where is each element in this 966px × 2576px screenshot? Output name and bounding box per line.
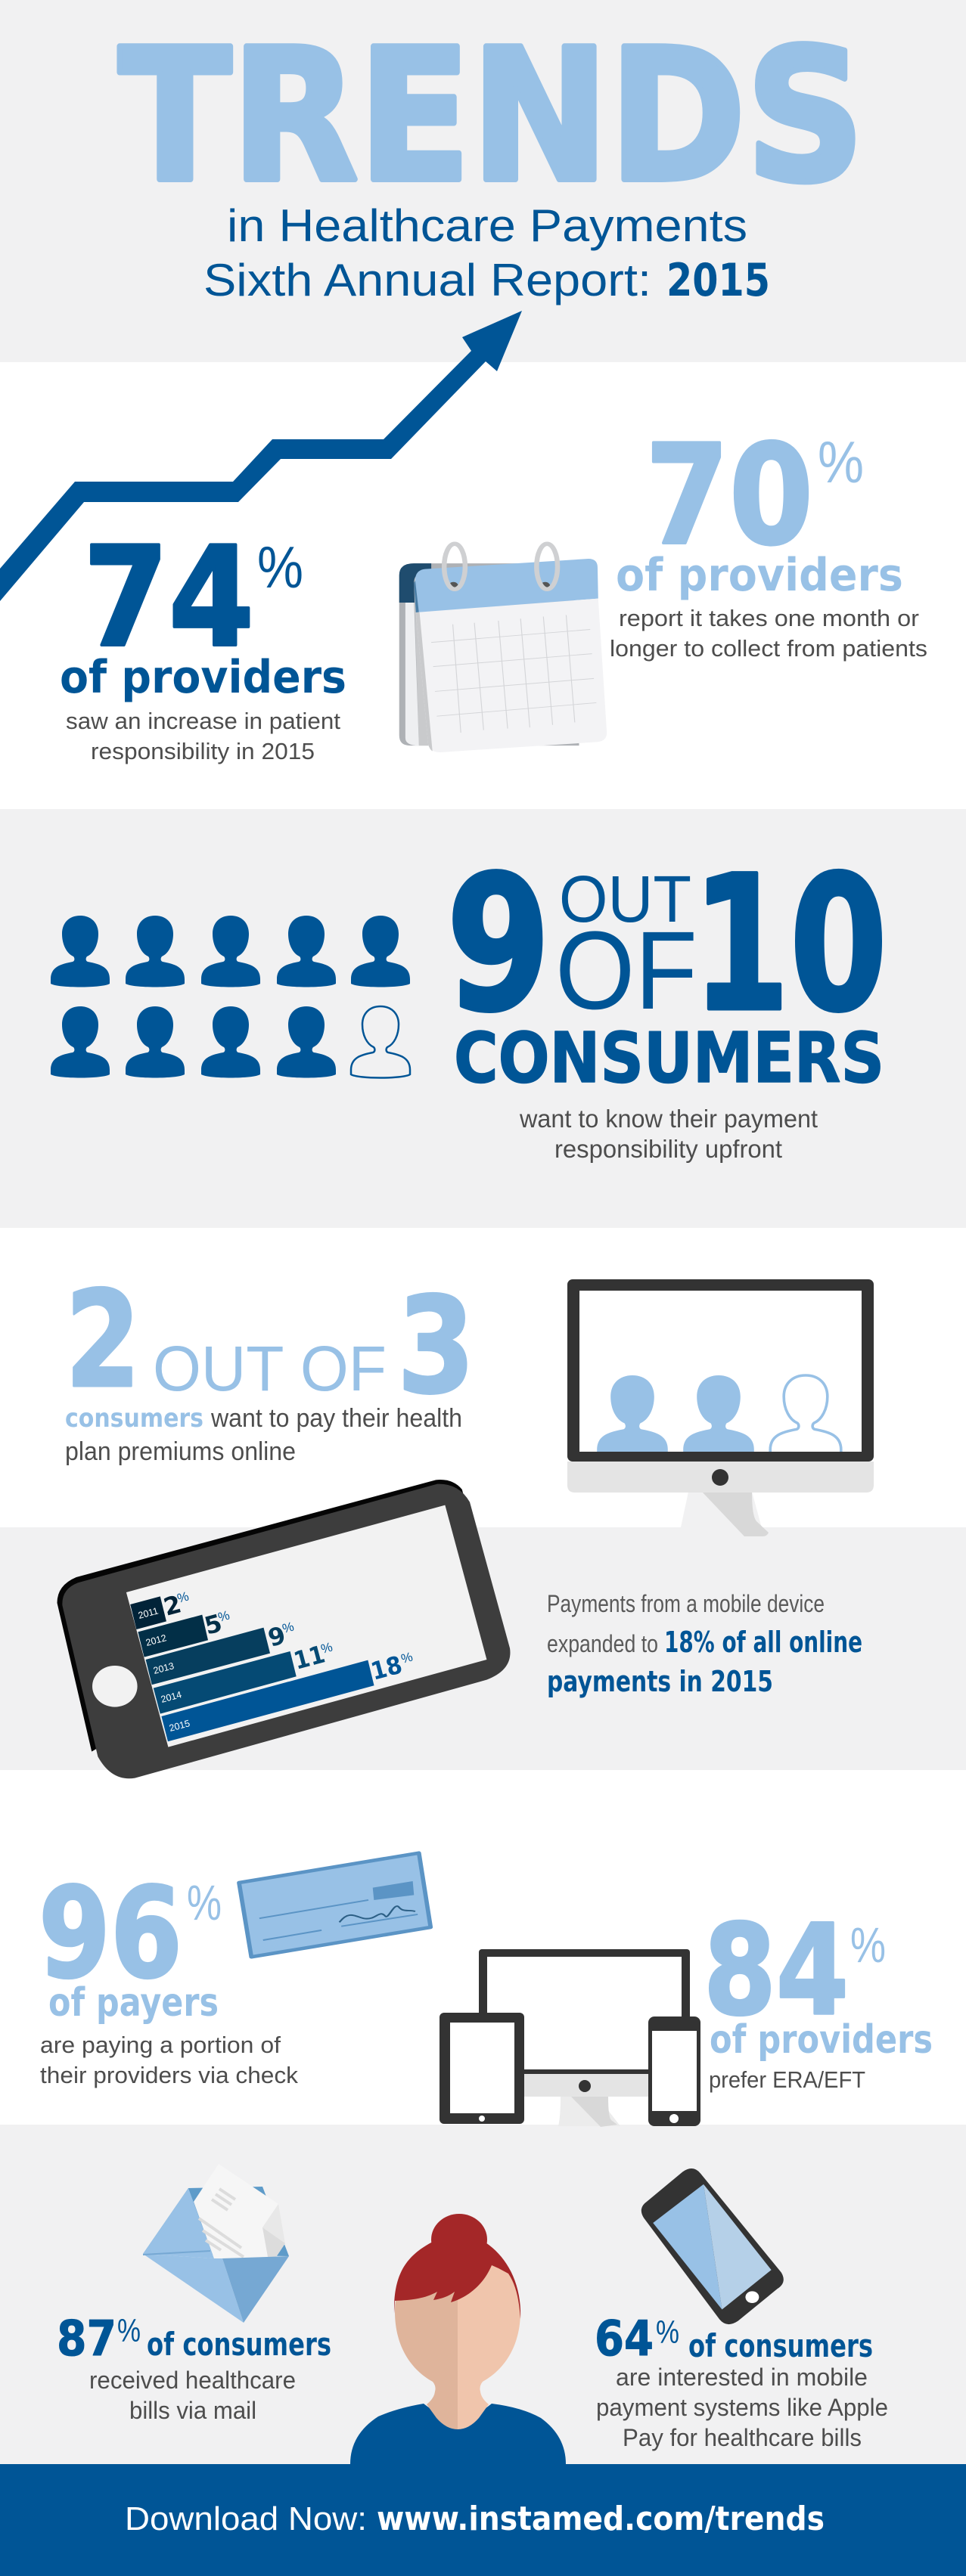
icon: landscape phone with bar chart bbox=[57, 1480, 510, 1778]
chart labels: 9 bbox=[265, 1620, 289, 1653]
stat: 70% of providers: 70 bbox=[645, 415, 813, 575]
stat: 87% of consumers: bills via mail bbox=[129, 2397, 256, 2424]
icon: calendar bbox=[399, 544, 607, 752]
stat: 96% of payers: 96 bbox=[39, 1861, 182, 2006]
stat: 64% of consumers: 64 bbox=[595, 2311, 654, 2367]
chart labels: 2011 bbox=[137, 1605, 160, 1621]
stat: 64% of consumers: are interested in mobile bbox=[616, 2364, 868, 2391]
illustration: woman bbox=[350, 2214, 566, 2464]
chart labels: 2015 bbox=[168, 1718, 191, 1734]
stat: 9 out of 10 consumers bbox=[446, 837, 887, 1163]
stat: 2 out of 3 consumers: OUT OF bbox=[153, 1333, 387, 1404]
stat: 84% of providers: prefer ERA/EFT bbox=[709, 2066, 865, 2093]
chart labels: % bbox=[399, 1650, 415, 1666]
stat: 96% of payers: are paying a portion of bbox=[40, 2032, 281, 2058]
chart labels: % bbox=[281, 1620, 296, 1636]
stat: 96% of payers bbox=[39, 1861, 299, 2088]
stat: 2 out of 3 consumers bbox=[65, 1263, 475, 1466]
stat: 74% of providers: saw an increase in patient bbox=[66, 708, 340, 734]
subtitle line two bbox=[203, 254, 770, 307]
text: mobile payments: Payments from a mobile device bbox=[547, 1590, 825, 1617]
stat: 64% of consumers: % bbox=[656, 2314, 679, 2351]
icon: envelope with letter bbox=[143, 2164, 289, 2323]
panel: header background bbox=[0, 0, 966, 362]
stat: 84% of providers: 84 bbox=[704, 1898, 849, 2043]
stat: 2 out of 3 consumers: 2 bbox=[65, 1263, 141, 1418]
stat: 64% of consumers: payment systems like Apple bbox=[596, 2394, 888, 2421]
chart labels: 2012 bbox=[144, 1632, 168, 1648]
stat: 2 out of 3 consumers: plan premiums online bbox=[65, 1437, 296, 1466]
stat: 87% of consumers: of consumers bbox=[147, 2326, 331, 2363]
stat: 64% of consumers: of consumers bbox=[688, 2327, 873, 2364]
chart labels: 2 bbox=[160, 1589, 185, 1622]
subtitle line two: Sixth Annual Report: bbox=[203, 255, 651, 305]
stat: 2 out of 3 consumers: 3 bbox=[397, 1269, 475, 1424]
icon: desktop, tablet and phone bbox=[440, 1949, 700, 2127]
panel: people background bbox=[0, 809, 966, 1228]
chart labels: % bbox=[216, 1608, 231, 1625]
text: mobile payments: expanded to bbox=[547, 1630, 658, 1657]
stat: 74% of providers: responsibility in 2015 bbox=[91, 738, 315, 764]
stat: 9 out of 10 consumers: OF bbox=[555, 909, 697, 1033]
footer: Download Now: bbox=[125, 2500, 367, 2537]
stat: 87% of consumers bbox=[57, 2311, 331, 2424]
stat: 84% of providers bbox=[704, 1898, 933, 2093]
chart labels: % bbox=[175, 1589, 191, 1606]
stat: 64% of consumers: Pay for healthcare bills bbox=[623, 2424, 862, 2451]
pictogram: nine of ten people bbox=[51, 916, 410, 1078]
chart labels bbox=[137, 1589, 415, 1734]
stat: 74% of providers: of providers bbox=[60, 651, 346, 704]
stat: 70% of providers: report it takes one month or bbox=[619, 605, 919, 631]
footer: www.instamed.com/trends bbox=[377, 2500, 825, 2538]
stat: 70% of providers: of providers bbox=[616, 549, 903, 602]
stat: 87% of consumers: % bbox=[117, 2313, 141, 2349]
stat: 70% of providers bbox=[610, 415, 927, 662]
stat: 2 out of 3 consumers: consumers bbox=[65, 1403, 203, 1434]
stat: 9 out of 10 consumers: 9 bbox=[446, 837, 551, 1053]
stat: 2 out of 3 consumers: want to pay their health bbox=[210, 1404, 462, 1433]
chart labels: 2014 bbox=[160, 1689, 183, 1705]
stat: 74% of providers: 74 bbox=[83, 517, 254, 677]
stat: 96% of payers: their providers via check bbox=[40, 2062, 299, 2088]
stat: 64% of consumers bbox=[595, 2311, 888, 2451]
stat: 87% of consumers: 87 bbox=[57, 2311, 116, 2367]
stat: 70% of providers: longer to collect from patients bbox=[610, 635, 927, 662]
subtitle line two: 2015 bbox=[666, 254, 770, 307]
stat: 9 out of 10 consumers: want to know their payment bbox=[519, 1105, 818, 1133]
chart labels: 5 bbox=[201, 1608, 225, 1641]
stat: 9 out of 10 consumers: responsibility upfront bbox=[554, 1135, 782, 1163]
footer bbox=[0, 2464, 966, 2576]
stat: 9 out of 10 consumers: CONSUMERS bbox=[454, 1018, 884, 1099]
icon: tilted smartphone bbox=[641, 2168, 784, 2324]
chart labels: 2013 bbox=[152, 1660, 175, 1676]
icon: desktop monitor bbox=[567, 1279, 874, 1536]
stat: 84% of providers: % bbox=[850, 1917, 886, 1973]
text: mobile payments: payments in 2015 bbox=[547, 1665, 773, 1698]
stat: 9 out of 10 consumers: 10 bbox=[692, 837, 887, 1053]
icon: check bbox=[239, 1853, 430, 1957]
chart labels: 18 bbox=[368, 1650, 405, 1686]
title: TRENDS bbox=[119, 10, 865, 222]
stat: 9 out of 10 consumers: OUT bbox=[559, 863, 691, 936]
chart labels: % bbox=[319, 1640, 334, 1657]
text: mobile payments bbox=[547, 1590, 862, 1698]
arrow: rising trend bbox=[0, 311, 522, 601]
panel: mail and woman background bbox=[0, 2125, 966, 2465]
stat: 70% of providers: % bbox=[818, 429, 864, 495]
stat: 74% of providers: % bbox=[257, 534, 303, 600]
subtitle line one: in Healthcare Payments bbox=[227, 200, 747, 251]
hair bbox=[394, 2214, 520, 2319]
stat: 96% of payers: of payers bbox=[48, 1980, 219, 2026]
chart labels: 11 bbox=[290, 1639, 328, 1675]
stat: 87% of consumers: received healthcare bbox=[89, 2367, 296, 2394]
panel: mobile background bbox=[0, 1527, 966, 1770]
text: mobile payments: 18% of all online bbox=[664, 1626, 862, 1659]
stat: 96% of payers: % bbox=[187, 1874, 222, 1930]
stat: 74% of providers bbox=[60, 517, 346, 764]
